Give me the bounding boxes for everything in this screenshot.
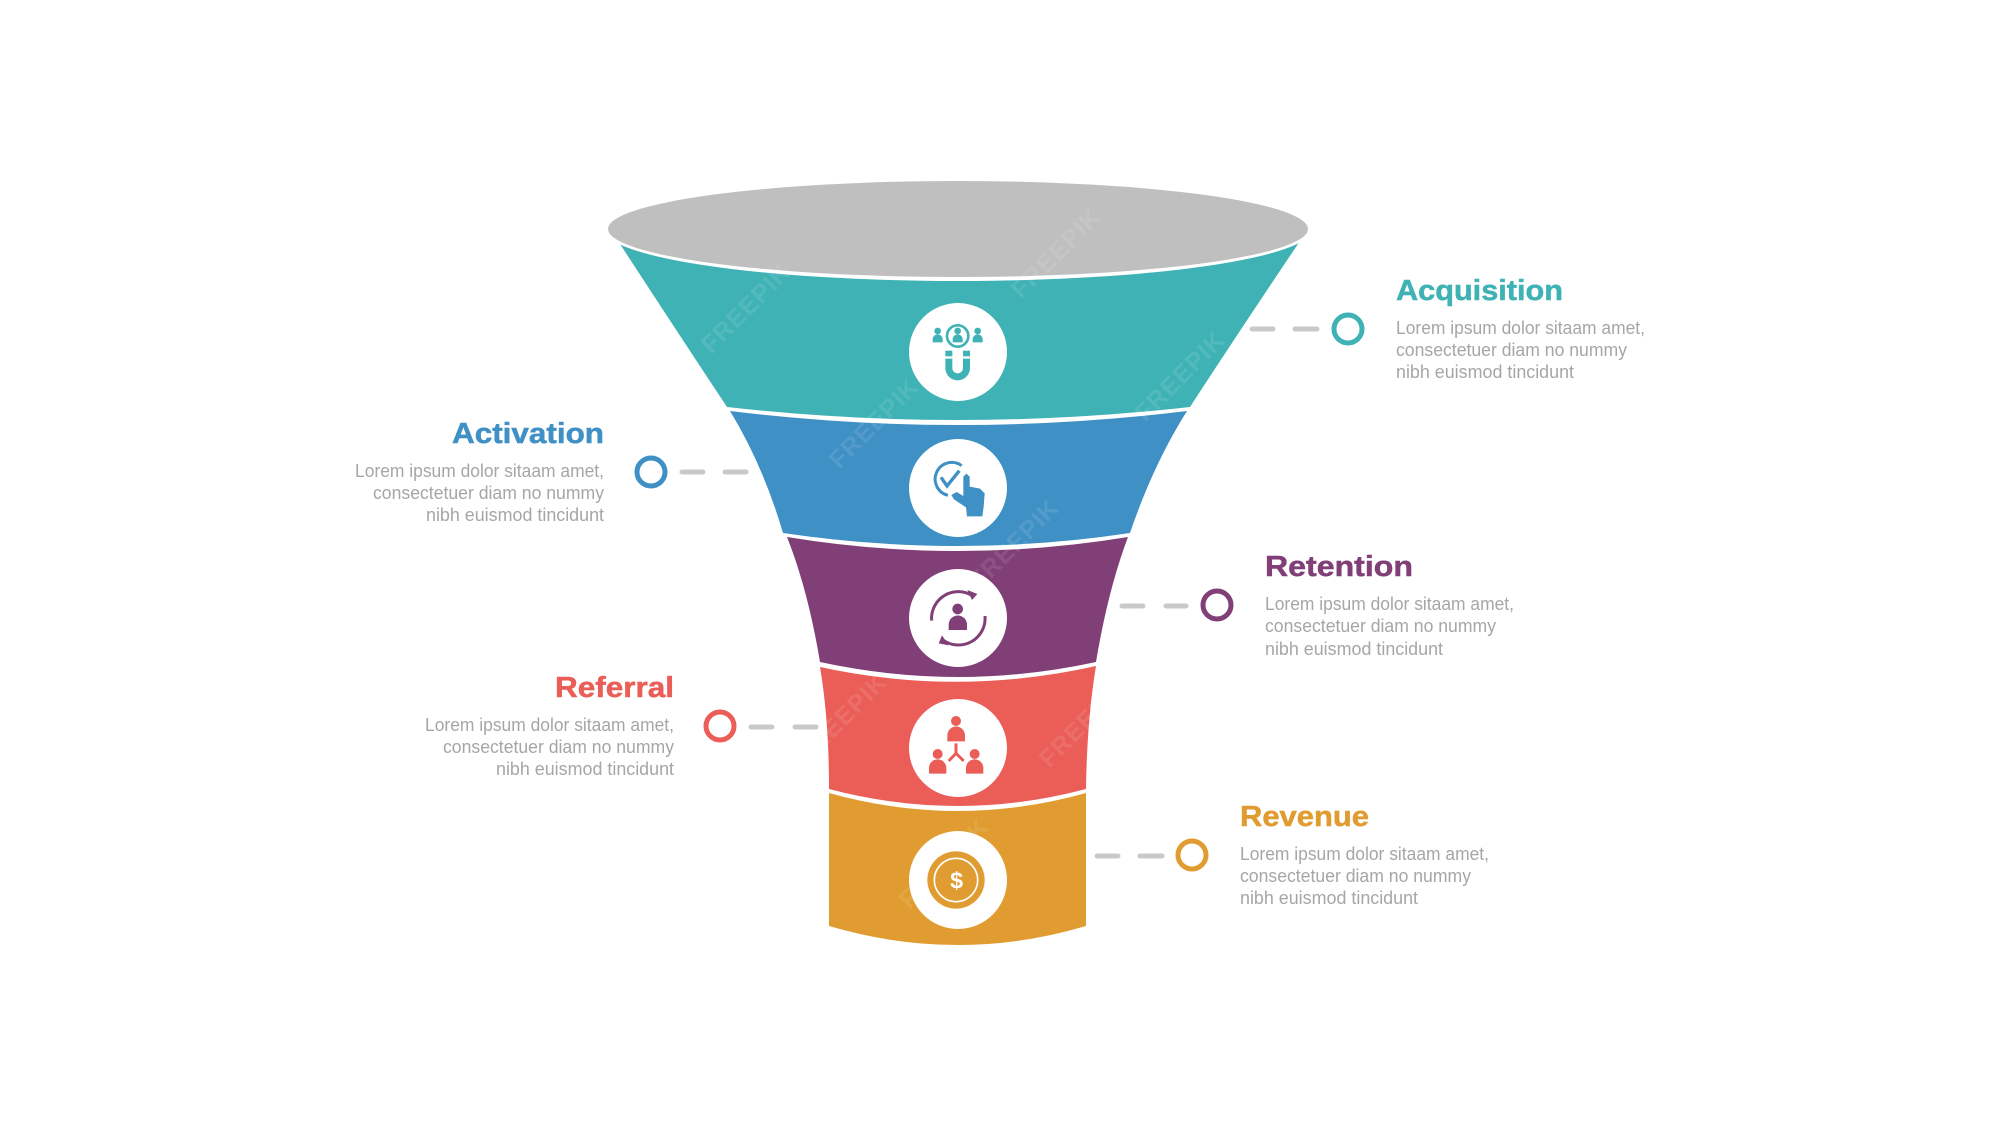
watermarks	[696, 203, 1231, 914]
callout: revenue: consectetuer diam no nummy	[1240, 865, 1472, 886]
funnel layer: referral	[820, 666, 1096, 806]
callout: retention: consectetuer diam no nummy	[1265, 615, 1497, 636]
watermarks: FREEPIK	[792, 668, 893, 769]
watermarks: FREEPIK	[894, 813, 995, 914]
callout: retention: Retention	[1265, 551, 1413, 583]
callout: revenue	[1097, 801, 1489, 908]
callout: referral: Lorem ipsum dolor sitaam amet,	[425, 714, 674, 735]
watermarks: FREEPIK	[1006, 203, 1107, 304]
icon: person retention cycle	[909, 569, 1007, 667]
funnel layer: retention	[787, 537, 1128, 677]
callout: acquisition: Acquisition	[1396, 275, 1563, 307]
callout: acquisition	[1252, 275, 1645, 382]
watermarks: FREEPIK	[696, 258, 797, 359]
callout: retention: Lorem ipsum dolor sitaam amet,	[1265, 593, 1514, 614]
funnel	[604, 177, 1312, 945]
funnel opening ellipse	[608, 181, 1308, 277]
icon: magnet attracting people	[909, 303, 1007, 401]
callout: activation: nibh euismod tincidunt	[426, 504, 604, 525]
callout: activation: Lorem ipsum dolor sitaam amet,	[355, 460, 604, 481]
funnel layer: acquisition	[610, 225, 1306, 420]
funnel layer: activation	[730, 411, 1187, 546]
callout: acquisition: Lorem ipsum dolor sitaam amet,	[1396, 317, 1645, 338]
callout: referral: nibh euismod tincidunt	[496, 758, 674, 779]
icon: dollar coin: $	[950, 867, 963, 893]
callout: revenue: Revenue	[1240, 801, 1369, 833]
watermarks: FREEPIK	[1034, 672, 1135, 773]
callout: retention: nibh euismod tincidunt	[1265, 638, 1443, 659]
callout: acquisition: nibh euismod tincidunt	[1396, 361, 1574, 382]
callout: acquisition: consectetuer diam no nummy	[1396, 339, 1628, 360]
callout: activation: Activation	[452, 418, 604, 450]
icon: referral network	[909, 699, 1007, 797]
funnel layer: revenue	[829, 793, 1086, 945]
callout: revenue: nibh euismod tincidunt	[1240, 887, 1418, 908]
callout: activation	[355, 418, 746, 525]
icon: dollar coin	[909, 831, 1007, 929]
callout: referral: consectetuer diam no nummy	[443, 736, 675, 757]
watermarks: FREEPIK	[964, 494, 1065, 595]
callout: referral	[425, 672, 816, 779]
callout: referral: Referral	[555, 672, 674, 704]
watermarks: FREEPIK	[1130, 326, 1231, 427]
callout: activation: consectetuer diam no nummy	[373, 482, 605, 503]
funnel rim outline	[604, 177, 1312, 281]
callout: revenue: Lorem ipsum dolor sitaam amet,	[1240, 843, 1489, 864]
callout: retention	[1122, 551, 1514, 659]
icon: click with checkmark	[909, 439, 1007, 537]
watermarks: FREEPIK	[824, 373, 925, 474]
